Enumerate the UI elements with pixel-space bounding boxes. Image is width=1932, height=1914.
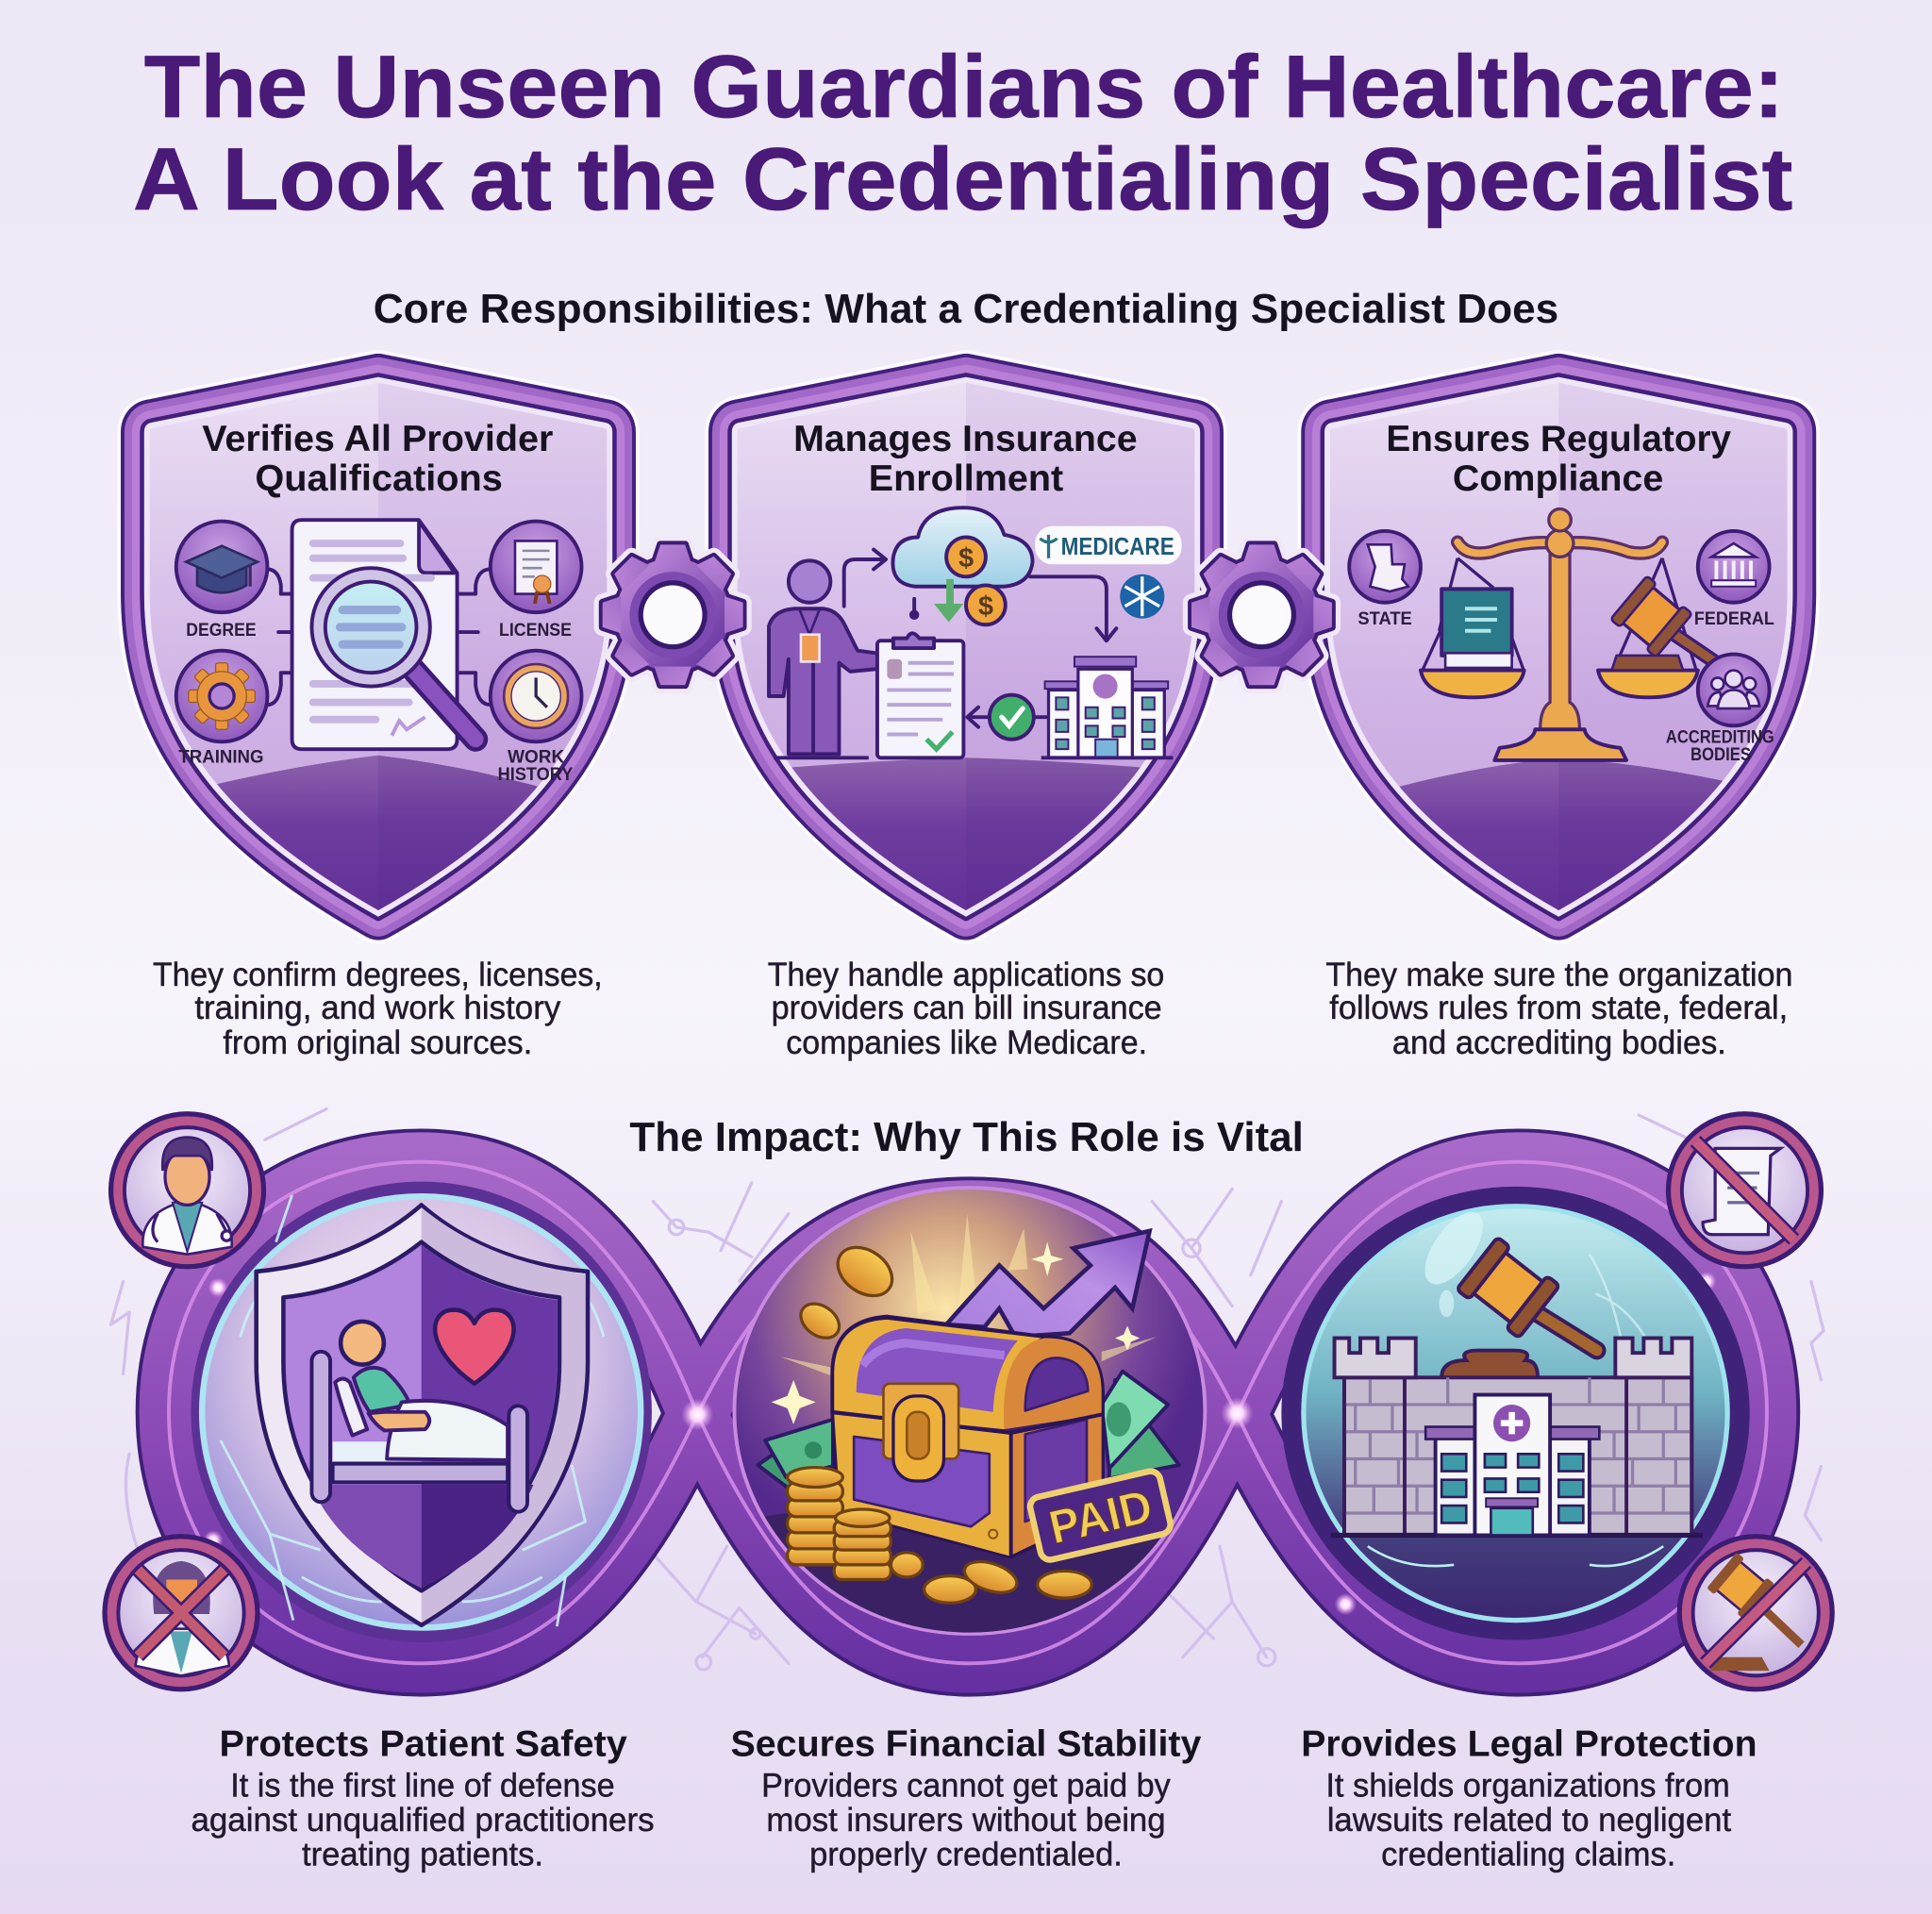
icon: cloud with coins: $ [978,591,993,622]
text: secures financial stability [731,1723,1202,1873]
label: paid stamp [1028,1470,1173,1562]
label: work history: HISTORY [498,764,573,785]
text: enrollment description: They handle applications so [768,957,1164,993]
text: enrollment description: providers can bill insurance [772,990,1162,1026]
label: degree: DEGREE [186,620,257,641]
shield title 2 [793,419,1138,499]
panel: verifies provider qualifications [132,370,625,924]
icon: treasure chest [833,1317,1102,1556]
panel: manages insurance enrollment [720,370,1212,924]
icon: work history clock [491,651,581,741]
shield frame 3 [1312,370,1805,924]
heading: core responsibilities: Core Responsibilities: What a Credentialing Specialist Does [374,287,1558,332]
icon: gear connector right [1191,544,1332,685]
label: work history [498,747,573,785]
text: enrollment description [768,957,1164,1061]
orb [191,1182,652,1642]
label: accrediting bodies: ACCREDITING [1666,727,1774,748]
title: A Look at the Credentialing Specialist [133,129,1792,228]
text: provides legal protection: credentialing claims. [1381,1837,1675,1873]
text: protects patient safety: It is the first line of defense [230,1767,615,1804]
badge: lawsuit document crossed out [1668,1114,1821,1267]
icon: federal [1698,531,1770,603]
icon: gavel [1610,575,1716,671]
shield title 1: Verifies All Provider [202,419,553,459]
badge: medicare [1035,526,1182,564]
title [133,37,1792,228]
shield frame 2 [720,370,1212,924]
icon: hospital in castle [1425,1395,1599,1535]
title: The Unseen Guardians of Healthcare: [144,37,1784,136]
text: compliance description: They make sure the organization [1325,957,1792,993]
text: provides legal protection: Provides Legal Protection [1301,1723,1757,1764]
text: secures financial stability: most insurers without being [766,1802,1166,1839]
text: secures financial stability: Providers cannot get paid by [761,1767,1171,1804]
label: accrediting bodies [1666,727,1774,765]
text: enrollment description: companies like Medicare. [786,1024,1147,1061]
icon: patient shield [257,1205,588,1625]
text: protects patient safety: against unqualified practitioners [191,1802,655,1839]
icon: growth arrow [946,1231,1150,1337]
decorative lightning between orbs [111,1109,1824,1670]
badge: gavel crossed out [1679,1537,1832,1689]
orb [1281,1187,1750,1639]
panel: ensures regulatory compliance [1312,370,1805,924]
icon: state [1349,531,1421,603]
shield title 3 [1386,419,1731,499]
orb [727,1188,1214,1639]
icon: coins [788,1238,1091,1603]
label: federal: FEDERAL [1694,608,1774,629]
text: compliance description: follows rules from state, federal, [1329,990,1788,1026]
text: protects patient safety: treating patients. [302,1837,543,1873]
arrow and green check [967,695,1047,740]
shield title 3: Ensures Regulatory [1386,419,1731,459]
icon: training [176,651,267,741]
text: verifies description: They confirm degrees, licenses, [153,957,603,993]
text: compliance description [1325,957,1792,1061]
label: paid stamp: PAID [1044,1479,1157,1554]
icon: hospital [1041,657,1173,757]
label: state: STATE [1357,608,1412,629]
icon: cloud with coins [892,508,1033,624]
arrow: person to cloud [844,550,886,607]
icon: book [1441,589,1512,668]
document with signature [292,520,458,749]
icon: blue star of life [1120,574,1164,619]
text: secures financial stability: properly credentialed. [809,1837,1123,1873]
infinity chain band [169,1162,1767,1663]
shield title 1: Qualifications [255,458,503,499]
shield title 2: Manages Insurance [793,419,1138,459]
label: work history: WORK [508,747,564,768]
badge: medicare: MEDICARE [1061,532,1174,560]
text: verifies description: training, and work history [194,990,561,1026]
icon: castle wall [1331,1338,1703,1535]
icon: degree [176,522,267,612]
badge: unqualified practitioner crossed out [105,1537,258,1689]
icon: gear connector left [603,544,743,685]
icon: balance scale [1421,508,1698,760]
panel: financial stability orb [727,1188,1214,1639]
shield title 3: Compliance [1453,458,1663,499]
panel: legal protection orb [1281,1114,1832,1689]
icon: magnifying glass [311,568,475,740]
label: license: LICENSE [499,620,572,641]
shield title 1 [202,419,553,499]
clipboard [877,633,963,757]
icon: accrediting bodies [1698,655,1770,725]
icon: money bills [758,1372,1179,1489]
label: training: TRAINING [178,747,264,768]
text: provides legal protection [1301,1723,1757,1873]
panel: patient safety orb [105,1114,652,1689]
glow nodes [204,1272,1718,1615]
text: provides legal protection: lawsuits related to negligent [1327,1802,1731,1839]
text: protects patient safety: Protects Patient Safety [219,1723,627,1764]
text: verifies description: from original sources. [223,1024,532,1061]
shield title 2: Enrollment [869,458,1063,499]
sparkles [772,1242,1140,1424]
text: provides legal protection: It shields organizations from [1325,1767,1730,1804]
icon: patient in bed and heart [311,1310,527,1512]
text: compliance description: and accrediting bodies. [1392,1024,1726,1061]
shield frame 1 [132,370,625,924]
label: accrediting bodies: BODIES [1690,744,1751,765]
text: verifies description [153,957,603,1061]
badge: doctor [111,1114,264,1267]
icon: license [491,522,581,612]
heading: the impact: The Impact: Why This Role is Vital [629,1115,1304,1160]
icon: gavel over castle [1441,1237,1597,1377]
text: secures financial stability: Secures Financial Stability [731,1723,1202,1764]
text: protects patient safety [191,1723,655,1873]
icon: cloud with coins: $ [958,543,974,574]
arrow: cloud to hospital [1030,576,1116,641]
icon: person with badge [769,560,881,757]
connector arrows [267,569,491,705]
